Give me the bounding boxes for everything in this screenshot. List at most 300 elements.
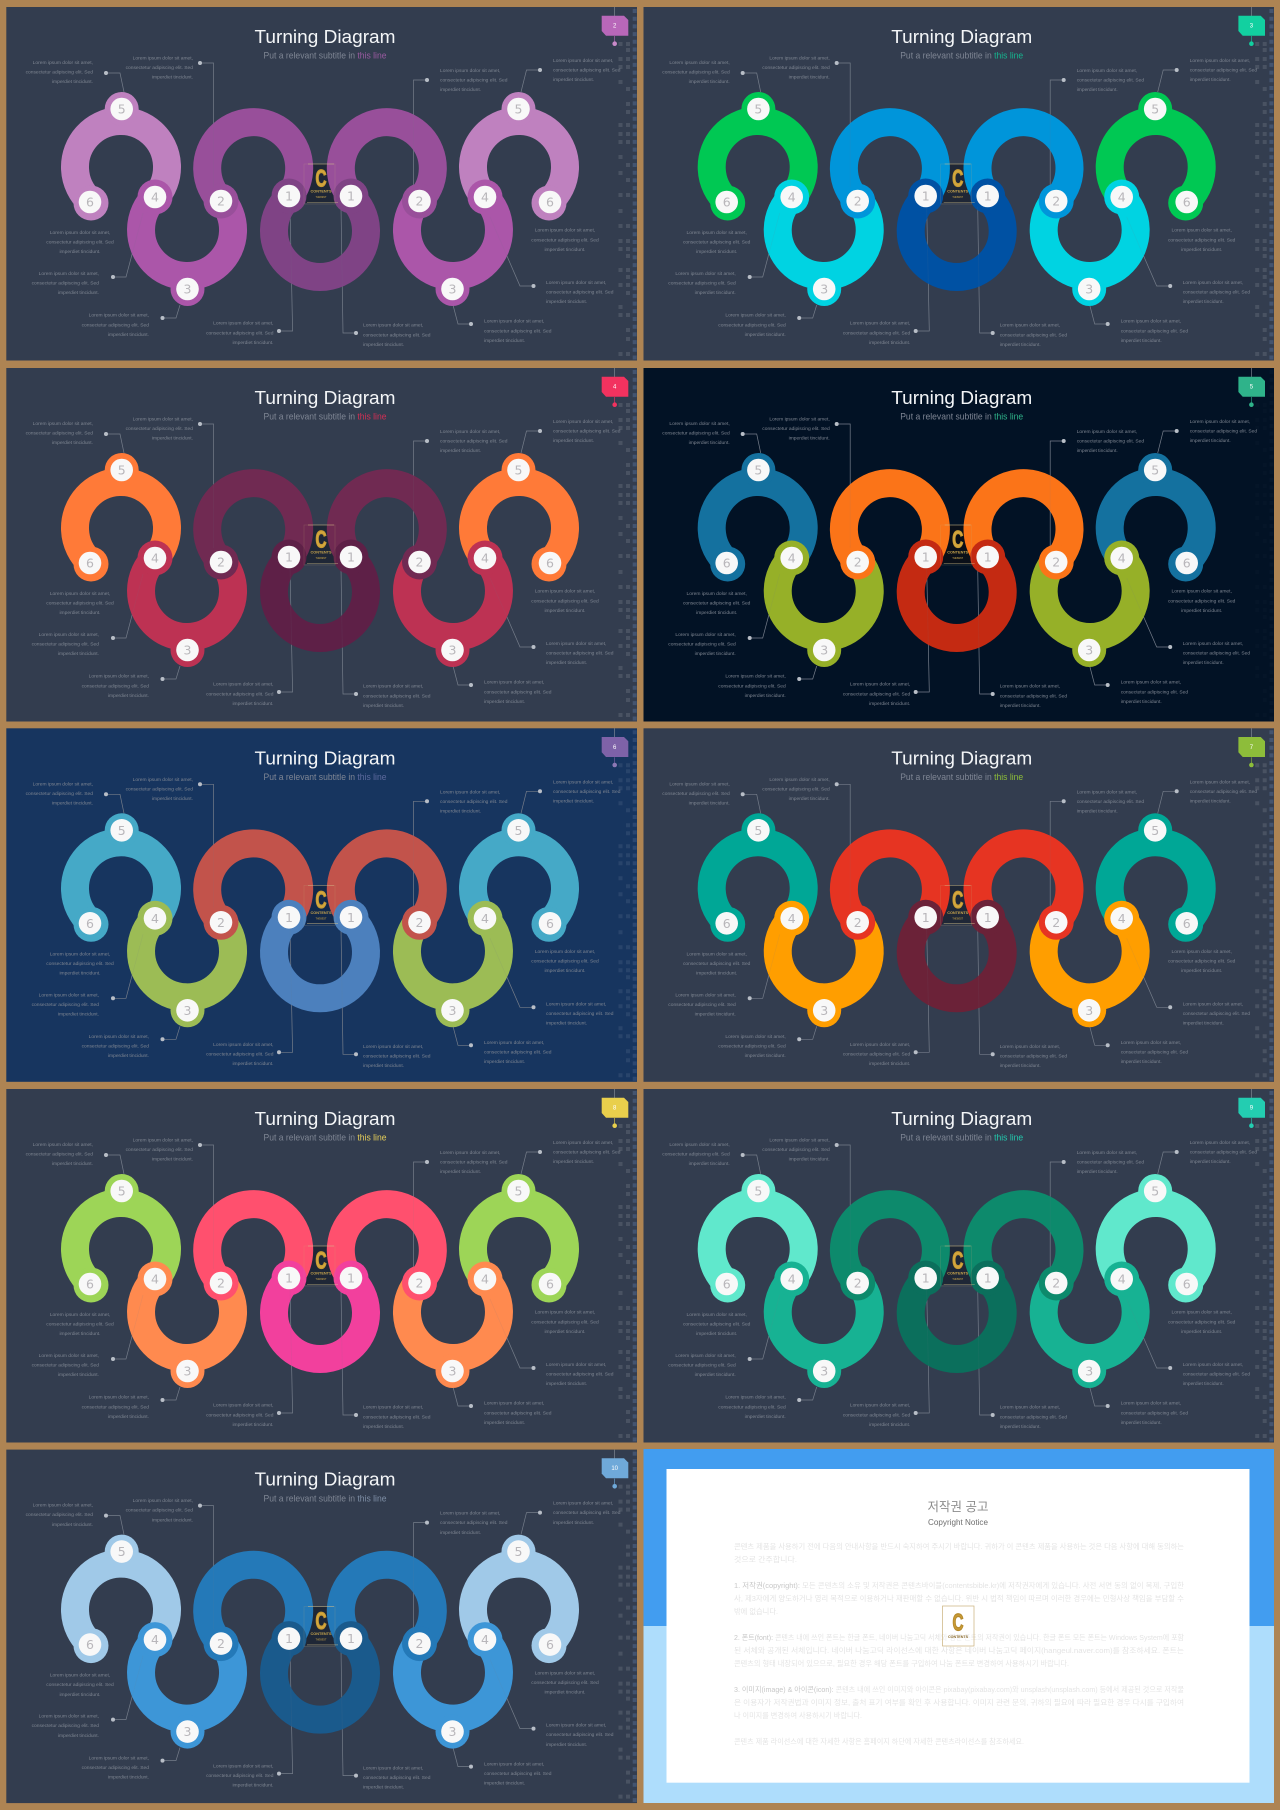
callout texts: consectetur adipiscing elit. Sed [546,290,614,296]
callout texts: consectetur adipiscing elit. Sed [662,431,730,437]
notice body text [734,1541,1184,1746]
center logo: C [952,1610,964,1636]
side rings [74,1174,566,1302]
bubble 5 right: 5 [515,102,522,117]
callout texts: consectetur adipiscing elit. Sed [1183,1011,1250,1017]
bubble 6 right [1175,912,1198,935]
bubble 5 left [747,1180,770,1202]
side rings [74,453,566,582]
callout texts: Lorem ipsum dolor sit amet, [1000,1406,1060,1411]
callout texts: Lorem ipsum dolor sit amet, [535,1311,595,1316]
title: Turning Diagram [891,387,1032,408]
callout texts: consectetur adipiscing elit. Sed [363,693,431,699]
callout texts: Lorem ipsum dolor sit amet, [1077,1151,1137,1156]
callout texts: Lorem ipsum dolor sit amet, [50,1313,110,1318]
bubble 3 right: 3 [449,282,456,297]
center logo: THEBEST [952,197,964,199]
top rings [204,1565,437,1661]
callout texts: consectetur adipiscing elit. Sed [683,1322,751,1328]
bubble 3 left: 3 [820,1364,828,1379]
bubble 6 left: 6 [86,195,94,210]
callout texts: imperdiet tincidunt. [546,1742,587,1748]
bubble 1 left [914,546,937,568]
bubble 1 left [278,1267,300,1289]
callout texts: Lorem ipsum dolor sit amet, [484,1041,544,1046]
bubble 2 right: 2 [416,1636,423,1651]
callout texts: imperdiet tincidunt. [689,800,730,806]
bubble 2 right [408,190,431,212]
bubble 1 left: 1 [922,189,930,204]
callout texts: imperdiet tincidunt. [696,970,737,976]
title: Turning Diagram [254,747,396,768]
callout texts: imperdiet tincidunt. [789,796,830,802]
bubble 5 left: 5 [118,823,126,838]
bubble 2 left: 2 [854,555,862,570]
lower rings [138,1622,502,1749]
callout texts: imperdiet tincidunt. [440,87,481,93]
callout texts: Lorem ipsum dolor sit amet, [1183,1002,1243,1007]
bubble 4 left: 4 [788,911,796,926]
callout texts: consectetur adipiscing elit. Sed [718,1044,786,1050]
callout texts [662,56,1257,348]
callout texts: consectetur adipiscing elit. Sed [46,1322,114,1328]
bubble 6 left [715,191,738,213]
callout texts: imperdiet tincidunt. [546,299,587,305]
bubble 4 left: 4 [151,1272,159,1287]
top rings [840,1204,1074,1300]
callout texts: consectetur adipiscing elit. Sed [553,68,621,74]
bubble 6 left: 6 [723,916,731,931]
bubble 3 right: 3 [1085,643,1093,658]
side rings [710,813,1203,942]
callout texts: Lorem ipsum dolor sit amet, [133,418,193,422]
bubble 6 right: 6 [546,195,554,210]
lower rings [774,901,1139,1027]
callout texts: consectetur adipiscing elit. Sed [26,1512,93,1518]
bubble 1 right [976,1267,999,1289]
callout texts: consectetur adipiscing elit. Sed [206,1412,274,1418]
callout texts: consectetur adipiscing elit. Sed [46,961,114,967]
top rings [840,122,1074,218]
center logo: CONTENTS [310,1272,332,1276]
callout texts: imperdiet tincidunt. [745,332,786,338]
bubble 3 left [176,639,199,661]
callout texts [26,416,621,709]
callout texts: Lorem ipsum dolor sit amet, [535,950,595,955]
bubble 2 left: 2 [217,915,225,930]
callout texts: imperdiet tincidunt. [789,436,830,442]
callout texts: Lorem ipsum dolor sit amet, [669,422,730,427]
callout texts: imperdiet tincidunt. [152,436,193,442]
callout texts: Lorem ipsum dolor sit amet, [725,675,786,680]
subtitle: Put a relevant subtitle in this line [900,772,1023,783]
callout texts: Lorem ipsum dolor sit amet, [687,952,747,957]
callout texts: imperdiet tincidunt. [544,608,586,614]
callout texts: imperdiet tincidunt. [1190,438,1231,444]
bubble 3 left [176,278,199,300]
callout texts: Lorem ipsum dolor sit amet, [363,1766,423,1771]
callout texts: consectetur adipiscing elit. Sed [668,642,736,648]
callout texts: consectetur adipiscing elit. Sed [126,786,193,792]
panel background upper blue [644,1449,1274,1626]
top rings [204,1204,437,1300]
notice body text: 3. 이미지(image) & 아이콘(icon): 콘텐츠 내에 쓰인 이미지와 아이콘은 pixabay(pixabay.com)와 unsplash(unsplash.com) 등에서 제공된 것으로 저작물 [734,1684,1184,1694]
bubble 1 right: 1 [984,910,992,925]
bubble 6 left [715,552,738,574]
callout texts: imperdiet tincidunt. [869,701,910,707]
bubble 3 left [813,639,836,661]
center logo: THEBEST [952,558,964,560]
callout texts: imperdiet tincidunt. [232,1061,274,1067]
side rings [710,453,1203,582]
bubble 5 right [507,819,530,842]
bubble 6 right: 6 [546,916,554,931]
bubble 2 right [1045,911,1068,934]
callout texts [26,1498,621,1790]
bubble 2 left: 2 [854,1276,862,1291]
callout texts: imperdiet tincidunt. [869,1422,910,1428]
callout texts: imperdiet tincidunt. [789,75,830,81]
callout texts: Lorem ipsum dolor sit amet, [725,314,786,319]
callout texts: Lorem ipsum dolor sit amet, [769,778,830,783]
page badge: 2 [613,24,617,30]
center logo: C [952,887,963,914]
callout texts: consectetur adipiscing elit. Sed [1000,332,1067,338]
title: Turning Diagram [254,1108,396,1129]
callout texts: consectetur adipiscing elit. Sed [762,426,830,432]
page badge: 10 [611,1466,619,1472]
callout texts: consectetur adipiscing elit. Sed [206,691,274,697]
bubble 1 right: 1 [984,550,992,565]
bubble 5 right: 5 [515,1184,522,1199]
center logo: CONTENTS [947,190,969,194]
bubble 6 left: 6 [723,556,731,571]
callout texts: Lorem ipsum dolor sit amet, [133,56,193,62]
callout texts: imperdiet tincidunt. [695,1012,736,1018]
bubble 6 right: 6 [1183,916,1191,931]
callout texts: imperdiet tincidunt. [544,247,586,253]
bubble 2 left [210,1632,232,1655]
callout texts: imperdiet tincidunt. [1000,342,1041,348]
callout texts: consectetur adipiscing elit. Sed [1190,68,1257,74]
callout texts: consectetur adipiscing elit. Sed [662,1152,730,1158]
bubble 2 right: 2 [416,1276,423,1291]
bubble 4 right: 4 [481,190,489,205]
bubble 4 left [780,186,803,208]
callout texts: consectetur adipiscing elit. Sed [1077,1160,1144,1166]
callout texts: imperdiet tincidunt. [58,1012,99,1018]
callout texts: imperdiet tincidunt. [1183,1020,1224,1026]
center logo [942,1246,972,1285]
bubble 2 right: 2 [416,194,423,209]
callout texts: imperdiet tincidunt. [52,79,93,85]
callout texts: Lorem ipsum dolor sit amet, [484,320,544,325]
callout texts: Lorem ipsum dolor sit amet, [1190,780,1250,785]
callout texts: consectetur adipiscing elit. Sed [484,689,552,695]
callout texts: imperdiet tincidunt. [1077,808,1118,814]
callout texts: imperdiet tincidunt. [546,660,587,666]
callout texts: imperdiet tincidunt. [52,440,93,446]
bubble 3 right: 3 [1085,1003,1093,1018]
page badge: 3 [1250,24,1254,30]
center logo: CONTENTS [310,1632,332,1636]
callout texts: imperdiet tincidunt. [52,1522,93,1528]
callout texts: consectetur adipiscing elit. Sed [683,601,751,607]
callout texts: consectetur adipiscing elit. Sed [440,1520,508,1526]
callout texts: consectetur adipiscing elit. Sed [1121,1410,1188,1416]
callout texts: Lorem ipsum dolor sit amet, [484,1762,544,1767]
callout texts: imperdiet tincidunt. [1183,1381,1224,1387]
bubble 5 right: 5 [1151,1184,1159,1199]
bubble 6 right: 6 [1183,556,1191,571]
bubble 5 left: 5 [754,463,762,478]
center ring [272,900,368,998]
callout texts: consectetur adipiscing elit. Sed [46,240,114,246]
callout texts: Lorem ipsum dolor sit amet, [89,1756,149,1761]
callout texts: consectetur adipiscing elit. Sed [484,1771,552,1777]
callout texts: imperdiet tincidunt. [52,1161,93,1167]
bubble 4 left [780,547,803,569]
lower rings [774,180,1139,306]
callout texts: Lorem ipsum dolor sit amet, [33,1504,93,1509]
bubble 3 left: 3 [820,282,828,297]
callout texts: imperdiet tincidunt. [696,1331,737,1337]
center logo [305,164,335,203]
center logo: CONTENTS [947,550,969,554]
bubble 5 right [507,1180,530,1202]
bubble 4 right [474,186,496,208]
bubble 3 left: 3 [820,1003,828,1018]
lower rings [138,180,502,306]
callout texts: Lorem ipsum dolor sit amet, [33,1143,93,1148]
callout texts: Lorem ipsum dolor sit amet, [50,952,110,957]
bubble 6 left: 6 [723,195,731,210]
center logo [942,1606,974,1646]
callout texts: imperdiet tincidunt. [1183,299,1224,305]
callout texts: Lorem ipsum dolor sit amet, [553,1502,613,1507]
callout texts: imperdiet tincidunt. [695,651,736,657]
callout texts: imperdiet tincidunt. [58,290,99,296]
callout texts: imperdiet tincidunt. [152,796,193,802]
callout texts: imperdiet tincidunt. [1121,1420,1162,1426]
center logo: CONTENTS [948,1634,968,1639]
callout texts: consectetur adipiscing elit. Sed [82,1044,149,1050]
bubble 3 right: 3 [449,1724,456,1739]
callout texts: consectetur adipiscing elit. Sed [553,429,621,435]
callout texts: consectetur adipiscing elit. Sed [546,1011,614,1017]
callout texts: consectetur adipiscing elit. Sed [668,1363,736,1369]
bubble 2 left: 2 [854,915,862,930]
callout texts: Lorem ipsum dolor sit amet, [553,780,613,785]
callout texts: consectetur adipiscing elit. Sed [718,683,786,689]
callout texts: consectetur adipiscing elit. Sed [1000,1414,1067,1420]
callout texts: imperdiet tincidunt. [232,1782,274,1788]
white notice card [666,1469,1250,1783]
callout texts: consectetur adipiscing elit. Sed [1000,693,1067,699]
center logo: THEBEST [316,558,327,560]
callout texts: Lorem ipsum dolor sit amet, [50,592,110,597]
callout texts: imperdiet tincidunt. [59,1331,101,1337]
center logo [305,1607,335,1646]
center logo: C [316,1248,326,1274]
notice body text: 된 서체와 공개된 서체입니다. 네이버 나눔고딕 라이선스에 대한 사항은 네이버 나눔고딕 페이지(hangeul.naver.com)를 참조하세요. 폰트는 [734,1645,1184,1655]
callout texts: imperdiet tincidunt. [869,1061,910,1067]
lower rings [774,1262,1139,1388]
bubble 2 left [210,551,232,573]
callout texts: consectetur adipiscing elit. Sed [843,1412,910,1418]
subtitle: Put a relevant subtitle in this line [264,51,386,62]
callout texts: imperdiet tincidunt. [58,1733,99,1739]
bubble 5 right [507,1540,530,1563]
bubble 6 left [715,1273,738,1295]
callout texts: consectetur adipiscing elit. Sed [1077,799,1144,805]
callout texts: consectetur adipiscing elit. Sed [531,959,599,965]
bubble 2 right [408,1632,431,1655]
callout texts: imperdiet tincidunt. [869,340,910,346]
callout texts: Lorem ipsum dolor sit amet, [1077,790,1137,795]
callout texts: imperdiet tincidunt. [440,808,481,814]
callout texts: consectetur adipiscing elit. Sed [126,426,193,432]
callout texts: Lorem ipsum dolor sit amet, [39,1715,99,1720]
callout texts: imperdiet tincidunt. [1181,968,1222,974]
bubble 5 right: 5 [1151,463,1159,478]
callout texts: consectetur adipiscing elit. Sed [440,78,508,84]
callout texts: consectetur adipiscing elit. Sed [1121,1050,1188,1056]
callout texts: consectetur adipiscing elit. Sed [32,1002,99,1008]
center logo: CONTENTS [310,550,332,554]
callout texts: consectetur adipiscing elit. Sed [718,322,786,328]
center logo: C [316,166,326,192]
callout texts: imperdiet tincidunt. [363,703,404,709]
callout texts: Lorem ipsum dolor sit amet, [89,314,149,319]
callout texts: Lorem ipsum dolor sit amet, [1183,281,1243,286]
bubble 4 right: 4 [1118,190,1126,205]
callout texts: Lorem ipsum dolor sit amet, [687,231,747,236]
side rings [74,813,566,942]
bubble 5 right: 5 [1151,102,1159,117]
title: Turning Diagram [254,26,396,47]
panel: slide 8 lime coral pink [6,1089,637,1442]
callout texts: Lorem ipsum dolor sit amet, [39,272,99,277]
callout texts: imperdiet tincidunt. [695,1372,736,1378]
center ring [908,900,1005,998]
bubble 4 left [144,907,166,930]
title: Turning Diagram [891,26,1032,47]
callout texts: imperdiet tincidunt. [58,1372,99,1378]
center logo: C [952,526,963,554]
notice heading Korean: 저작권 공고 [928,1500,988,1514]
bubble 5 left: 5 [754,823,762,838]
callout texts: consectetur adipiscing elit. Sed [553,1510,621,1516]
callout texts: imperdiet tincidunt. [1000,703,1041,709]
callout texts: Lorem ipsum dolor sit amet, [535,1671,595,1676]
callout texts: consectetur adipiscing elit. Sed [1168,1319,1236,1325]
lower rings [774,540,1139,667]
callout texts: consectetur adipiscing elit. Sed [762,786,830,792]
top rings [840,843,1074,940]
center ring [272,178,368,277]
page badge [602,728,628,767]
bubble 5 left [747,98,770,120]
callout texts: Lorem ipsum dolor sit amet, [669,61,730,66]
center ring [908,1260,1005,1359]
callout texts: Lorem ipsum dolor sit amet, [553,59,613,64]
bubble 2 left [210,911,232,934]
center logo: C [316,887,326,914]
bubble 3 right: 3 [449,1003,456,1018]
subtitle: Put a relevant subtitle in this line [900,412,1023,423]
callout texts: Lorem ipsum dolor sit amet, [213,683,274,688]
notice body text: 사, 제3자에게 양도하거나 영리 목적으로 이용하거나 재판매할 수 없습니다. 위반 시 법적 책임이 따르며 이러한 경우에는 민형사상 책임을 부담할 수 [734,1593,1184,1603]
callout texts: Lorem ipsum dolor sit amet, [213,1764,274,1769]
bubble 4 right [474,1628,496,1651]
bubble 3 right [1078,999,1100,1022]
callout texts: consectetur adipiscing elit. Sed [82,683,149,689]
bubble 6 left: 6 [86,916,94,931]
callout texts: imperdiet tincidunt. [108,693,149,699]
bubble 3 right [441,999,464,1022]
bubble 2 right [408,1272,431,1294]
callout texts: consectetur adipiscing elit. Sed [32,1363,99,1369]
callout texts: Lorem ipsum dolor sit amet, [769,418,830,422]
callout texts: imperdiet tincidunt. [363,1063,404,1069]
callout texts: consectetur adipiscing elit. Sed [206,1052,274,1058]
page badge [1238,1089,1265,1128]
callout texts: consectetur adipiscing elit. Sed [668,1002,736,1008]
bubble 1 right: 1 [347,189,355,204]
bubble 3 right [1078,1360,1100,1382]
center logo: CONTENTS [947,911,969,915]
center logo: C [316,1608,326,1635]
page badge: 4 [613,384,617,390]
bubble 5 right: 5 [515,1544,522,1559]
bubble 4 left [144,186,166,208]
bubble 6 left: 6 [86,1637,94,1652]
callout texts: imperdiet tincidunt. [553,438,594,444]
bubble 6 left: 6 [86,1277,94,1292]
callout texts: consectetur adipiscing elit. Sed [440,799,508,805]
callout texts: Lorem ipsum dolor sit amet, [89,1396,149,1401]
bubble 6 left [79,1633,101,1656]
callout texts: consectetur adipiscing elit. Sed [546,651,614,657]
panel: slide 3 green blue [644,7,1274,360]
bubble 6 left [79,191,101,213]
callout texts: imperdiet tincidunt. [484,699,525,705]
bubble 1 left [914,185,937,207]
callout texts: imperdiet tincidunt. [1190,798,1231,804]
bubble 4 left [144,1628,166,1651]
bubble 1 left: 1 [285,189,293,204]
bubble 5 left [110,819,133,842]
callout texts: consectetur adipiscing elit. Sed [82,1404,149,1410]
callout texts: Lorem ipsum dolor sit amet, [850,1404,910,1409]
callout texts: consectetur adipiscing elit. Sed [762,65,830,71]
bubble 5 left [110,98,133,120]
bubble 1 right [340,185,362,207]
bubble 2 right: 2 [1052,1276,1060,1291]
callout texts: Lorem ipsum dolor sit amet, [546,642,606,647]
bubble 5 right [1144,459,1166,481]
bubble 3 left: 3 [184,1364,191,1379]
bubble 4 left: 4 [788,1272,796,1287]
bubble 6 right [539,552,561,574]
bubble 6 left: 6 [86,556,94,571]
center logo [942,525,972,564]
bubble 2 right: 2 [416,915,423,930]
bubble 5 left: 5 [118,463,126,478]
callout texts: Lorem ipsum dolor sit amet, [484,681,544,686]
callout texts: consectetur adipiscing elit. Sed [26,1152,93,1158]
